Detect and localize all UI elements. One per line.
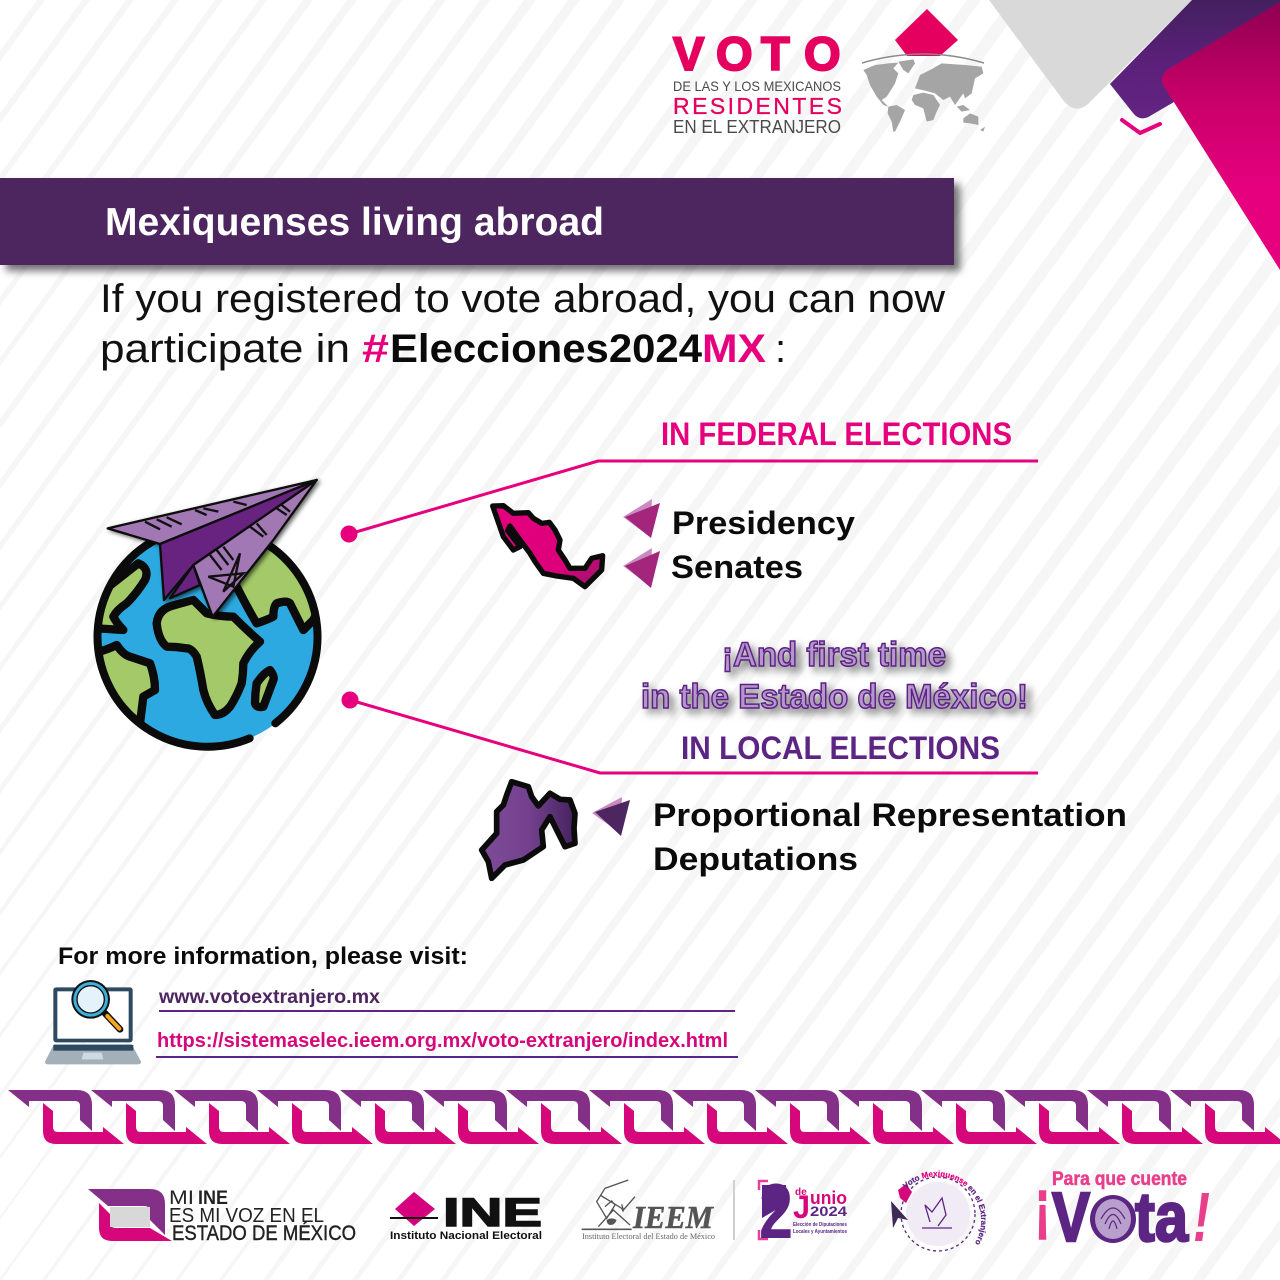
divider between logos [733, 1180, 735, 1240]
logo: 2 de Junio 2024: Elección de Diputaciones [793, 1222, 847, 1228]
logo: Voto de las y los mexicanos residentes en el extranjero: VOTO [673, 27, 841, 80]
intro text: # [362, 327, 389, 371]
logo: IEEM: Instituto Electoral del Estado de México [582, 1232, 715, 1241]
logo: Mi INE es mi voz en el Estado de México [88, 1188, 356, 1245]
logo: 2 de Junio 2024: 2024 [810, 1203, 847, 1219]
list: federal offices: Senates [671, 549, 803, 585]
logo: INE: INE [443, 1191, 542, 1235]
logo: 2 de Junio 2024 [759, 1167, 847, 1255]
list: federal offices: Presidency [672, 505, 855, 541]
logo: Mi INE es mi voz en el Estado de México: ES MI VOZ EN EL [169, 1205, 324, 1227]
link: votoextranjero: www.votoextranjero.mx [158, 987, 380, 1008]
logo: 2 de Junio 2024: de [795, 1187, 807, 1198]
connector: federal elections [340, 461, 1038, 542]
icon: map of Estado de México [482, 782, 575, 878]
intro text: Elecciones2024 [390, 327, 703, 371]
logo: IEEM: IEEM [632, 1199, 714, 1235]
callout: first time in the Estado de México [641, 636, 1028, 716]
logo: Voto de las y los mexicanos residentes en el extranjero: DE LAS Y LOS MEXICANOS [673, 78, 841, 94]
icon: globe with paper plane [93, 480, 327, 747]
logo: Voto de las y los mexicanos residentes en el extranjero: RESIDENTES [673, 93, 842, 119]
logo: Para que cuente ¡Vota!: ¡ [1035, 1165, 1050, 1243]
title banner: Mexiquenses living abroad [105, 201, 604, 244]
logo: INE: Instituto Nacional Electoral [390, 1230, 542, 1242]
bullet: senates [623, 548, 660, 588]
list: local office: Proportional Representation [653, 797, 1127, 833]
intro text: If you registered to vote abroad, you can now [100, 277, 945, 321]
heading: in federal elections: IN FEDERAL ELECTIONS [661, 416, 1012, 452]
logo: Para que cuente ¡Vota!: V [1052, 1178, 1090, 1256]
world map [863, 59, 985, 132]
list: local office [592, 797, 1127, 877]
title banner [0, 178, 954, 265]
logo: Voto Mexiquense en el Extranjero: Voto Mexiquense en el Extranjero [902, 1170, 986, 1245]
bullet: deputations [592, 797, 630, 836]
logo: Mi INE es mi voz en el Estado de México: INE [198, 1188, 228, 1209]
intro text: participate in [100, 327, 350, 371]
logo: Para que cuente ¡Vota!: ! [1193, 1178, 1210, 1256]
logo: Voto de las y los mexicanos residentes en el extranjero: EN EL EXTRANJERO [673, 117, 841, 137]
link: sistemaselec: https://sistemaselec.ieem.org.mx/voto-extranjero/index.html [157, 1030, 728, 1052]
logo: Para que cuente ¡Vota!: ta [1135, 1178, 1189, 1256]
logo: 2 de Junio 2024: 2 [759, 1167, 793, 1255]
callout: first time in the Estado de México: in the Estado de México! [641, 678, 1028, 716]
list: local office: Deputations [653, 841, 858, 877]
logo: 2 de Junio 2024: Locales y Ayuntamientos [793, 1229, 847, 1235]
intro text: MX [702, 327, 766, 371]
intro text: : [775, 327, 786, 371]
connector: local elections [342, 692, 1038, 773]
intro text [100, 277, 945, 371]
icon: laptop with magnifier [45, 980, 141, 1064]
logo: IEEM [582, 1180, 715, 1241]
icon: hand casting a vote [582, 1180, 635, 1229]
logo: Mi INE es mi voz en el Estado de México: ESTADO DE MÉXICO [172, 1222, 356, 1245]
logo: Voto de las y los mexicanos residentes en el extranjero [673, 27, 842, 137]
callout: first time in the Estado de México: ¡And first time [722, 636, 946, 674]
more information text: For more information, please visit: [58, 943, 468, 970]
logo: 2 de Junio 2024: J [793, 1189, 810, 1225]
list: federal offices [623, 499, 855, 588]
bullet: presidency [623, 499, 660, 538]
heading: in local elections: IN LOCAL ELECTIONS [681, 730, 1000, 766]
logo: Para que cuente ¡Vota!: Para que cuente [1052, 1169, 1187, 1190]
logo: INE [390, 1191, 542, 1242]
icon: map of Mexico [493, 506, 603, 587]
logo icon: ballot over world map [862, 9, 985, 132]
corner decoration: geometric shapes [989, 0, 1280, 270]
logo: Para que cuente ¡Vota! [1035, 1165, 1210, 1256]
logo: Mi INE es mi voz en el Estado de México: MI [169, 1188, 194, 1209]
chain band [8, 1090, 1280, 1144]
logo: 2 de Junio 2024: unio [810, 1188, 847, 1208]
